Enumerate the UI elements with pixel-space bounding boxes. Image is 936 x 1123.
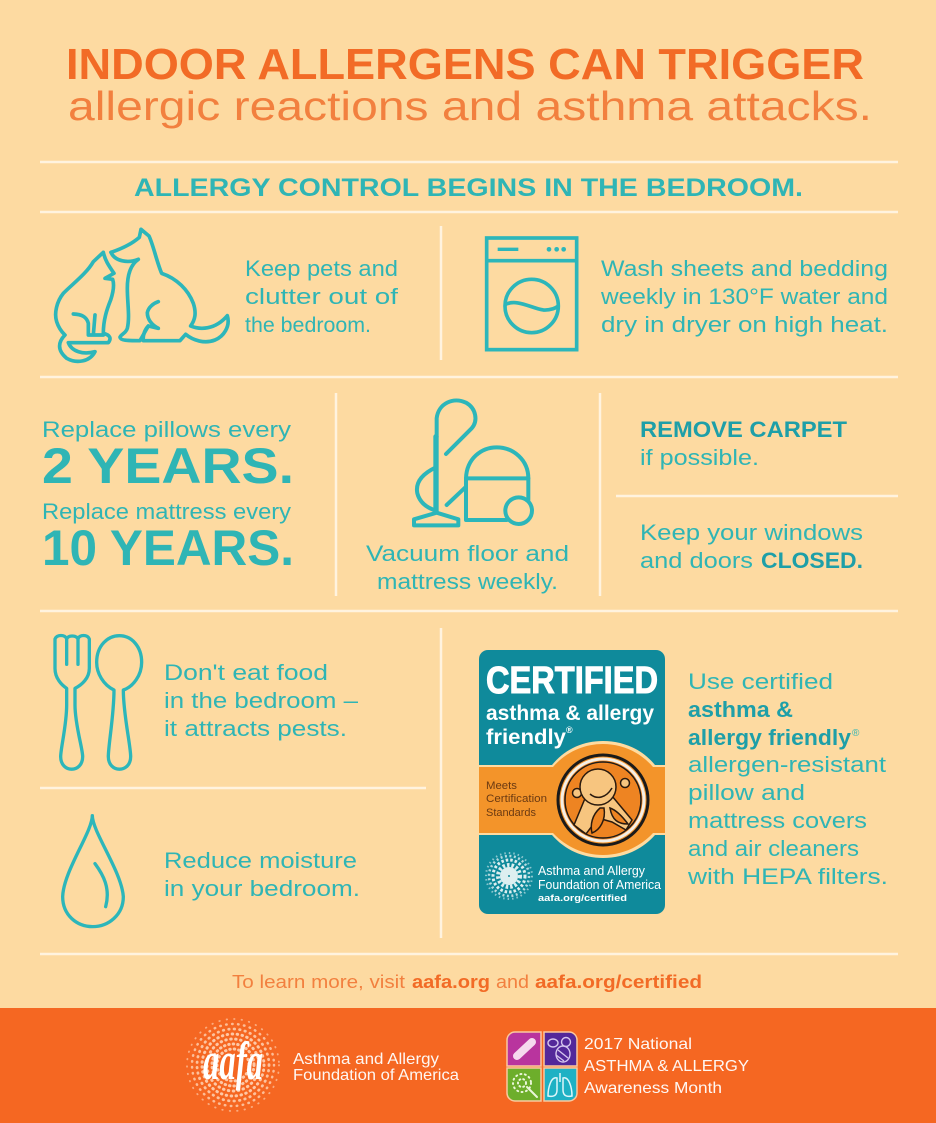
text: replace pillows and mattress: [42, 417, 294, 576]
logo: aafa: Foundation of America: [293, 1067, 459, 1084]
icon: cat and dog: [56, 229, 228, 361]
text: reduce moisture: in your bedroom.: [164, 876, 360, 901]
icon: child with lungs seal: [558, 755, 648, 845]
text: don't eat food: Don't eat food: [164, 660, 328, 685]
logo: aafa: Asthma and Allergy: [293, 1051, 439, 1068]
text: replace pillows and mattress: 2 YEARS.: [42, 438, 294, 494]
text: keep pets out: [245, 256, 399, 337]
text: don't eat food: [164, 660, 359, 741]
text: use certified: and air cleaners: [688, 836, 859, 861]
text: vacuum floor: Vacuum floor and: [366, 541, 569, 566]
badge: certified asthma and allergy friendly: Certification: [486, 793, 547, 805]
text: awareness month: 2017 National: [584, 1036, 692, 1053]
badge: certified asthma and allergy friendly: friendly: [486, 726, 566, 749]
text: replace pillows and mattress: Replace mattress every: [42, 499, 292, 524]
text: reduce moisture: [164, 848, 360, 901]
text: use certified: allergy friendly: [688, 725, 851, 750]
text: remove carpet: if possible.: [640, 445, 759, 470]
text: remove carpet: REMOVE CARPET: [640, 417, 847, 442]
title: [66, 40, 872, 129]
badge: certified asthma and allergy friendly: Foundation of America: [538, 878, 661, 892]
text: reduce moisture: Reduce moisture: [164, 848, 357, 873]
title: allergic reactions and asthma attacks.: [68, 83, 872, 129]
text: use certified: pillow and: [688, 780, 805, 805]
icon: aafa badge starburst: [486, 853, 532, 899]
badge: certified asthma and allergy friendly: asthma & allergy: [486, 702, 654, 725]
icon: dandelion: [513, 1074, 537, 1097]
badge: certified asthma and allergy friendly: CERTIFIED: [486, 660, 658, 702]
text: remove carpet: [640, 417, 847, 470]
text: use certified: asthma &: [688, 697, 793, 722]
text: learn more: [232, 972, 702, 992]
text: use certified: allergen-resistant: [688, 752, 887, 777]
logo: aafa: [187, 1019, 459, 1111]
badge: certified asthma and allergy friendly: Standards: [486, 807, 536, 819]
text: don't eat food: in the bedroom –: [164, 688, 359, 713]
text: learn more: aafa.org: [412, 972, 490, 992]
text: keep pets out: the bedroom.: [245, 314, 371, 337]
text: vacuum floor: [366, 541, 569, 594]
text: vacuum floor: mattress weekly.: [377, 569, 558, 594]
text: keep pets out: clutter out of: [245, 284, 399, 309]
text: use certified: Use certified: [688, 669, 833, 694]
text: use certified: [687, 669, 888, 889]
text: awareness month: [584, 1036, 749, 1097]
icon: water drop: [63, 816, 123, 927]
text: wash sheets: [600, 256, 888, 337]
text: keep pets out: Keep pets and: [245, 256, 398, 281]
icon: vacuum cleaner: [414, 400, 532, 525]
badge: certified asthma and allergy friendly: Asthma and Allergy: [538, 864, 646, 878]
badge: certified asthma and allergy friendly: aafa.org/certified: [538, 893, 627, 904]
text: awareness month: Awareness Month: [584, 1080, 722, 1097]
text: keep windows closed: Keep your windows: [640, 520, 863, 545]
text: use certified: ®: [852, 728, 860, 739]
text: replace pillows and mattress: 10 YEARS.: [42, 520, 294, 576]
text: wash sheets: weekly in 130°F water and: [600, 284, 888, 309]
text: keep windows closed: CLOSED.: [761, 548, 863, 573]
text: don't eat food: it attracts pests.: [164, 716, 347, 741]
icon: lungs: [548, 1073, 572, 1096]
heading: allergy control: ALLERGY CONTROL BEGINS IN THE BEDROOM.: [134, 174, 803, 202]
badge: certified asthma and allergy friendly: Meets: [486, 780, 518, 792]
text: awareness month: ASTHMA & ALLERGY: [584, 1058, 749, 1075]
icon: bee: [548, 1038, 570, 1062]
logo: aafa: aafa: [203, 1031, 263, 1091]
text: replace pillows and mattress: Replace pillows every: [42, 417, 292, 442]
logo: awareness month icons: [507, 1032, 749, 1101]
text: keep windows closed: [640, 520, 863, 573]
text: use certified: with HEPA filters.: [687, 864, 888, 889]
title: INDOOR ALLERGENS CAN TRIGGER: [66, 40, 864, 89]
text: learn more: To learn more, visit: [232, 972, 405, 992]
icon: washing machine: [487, 238, 577, 350]
badge: certified asthma and allergy friendly: ®: [566, 725, 573, 735]
text: use certified: mattress covers: [688, 808, 867, 833]
text: learn more: aafa.org/certified: [535, 972, 702, 992]
text: wash sheets: dry in dryer on high heat.: [601, 312, 888, 337]
icon: fork and spoon: [55, 635, 142, 769]
icon: peanut: [517, 1042, 532, 1056]
text: learn more: and: [496, 972, 529, 992]
text: keep windows closed: and doors: [640, 548, 753, 573]
footer band: [0, 1008, 936, 1123]
badge: certified asthma and allergy friendly: [479, 650, 665, 914]
text: wash sheets: Wash sheets and bedding: [601, 256, 888, 281]
